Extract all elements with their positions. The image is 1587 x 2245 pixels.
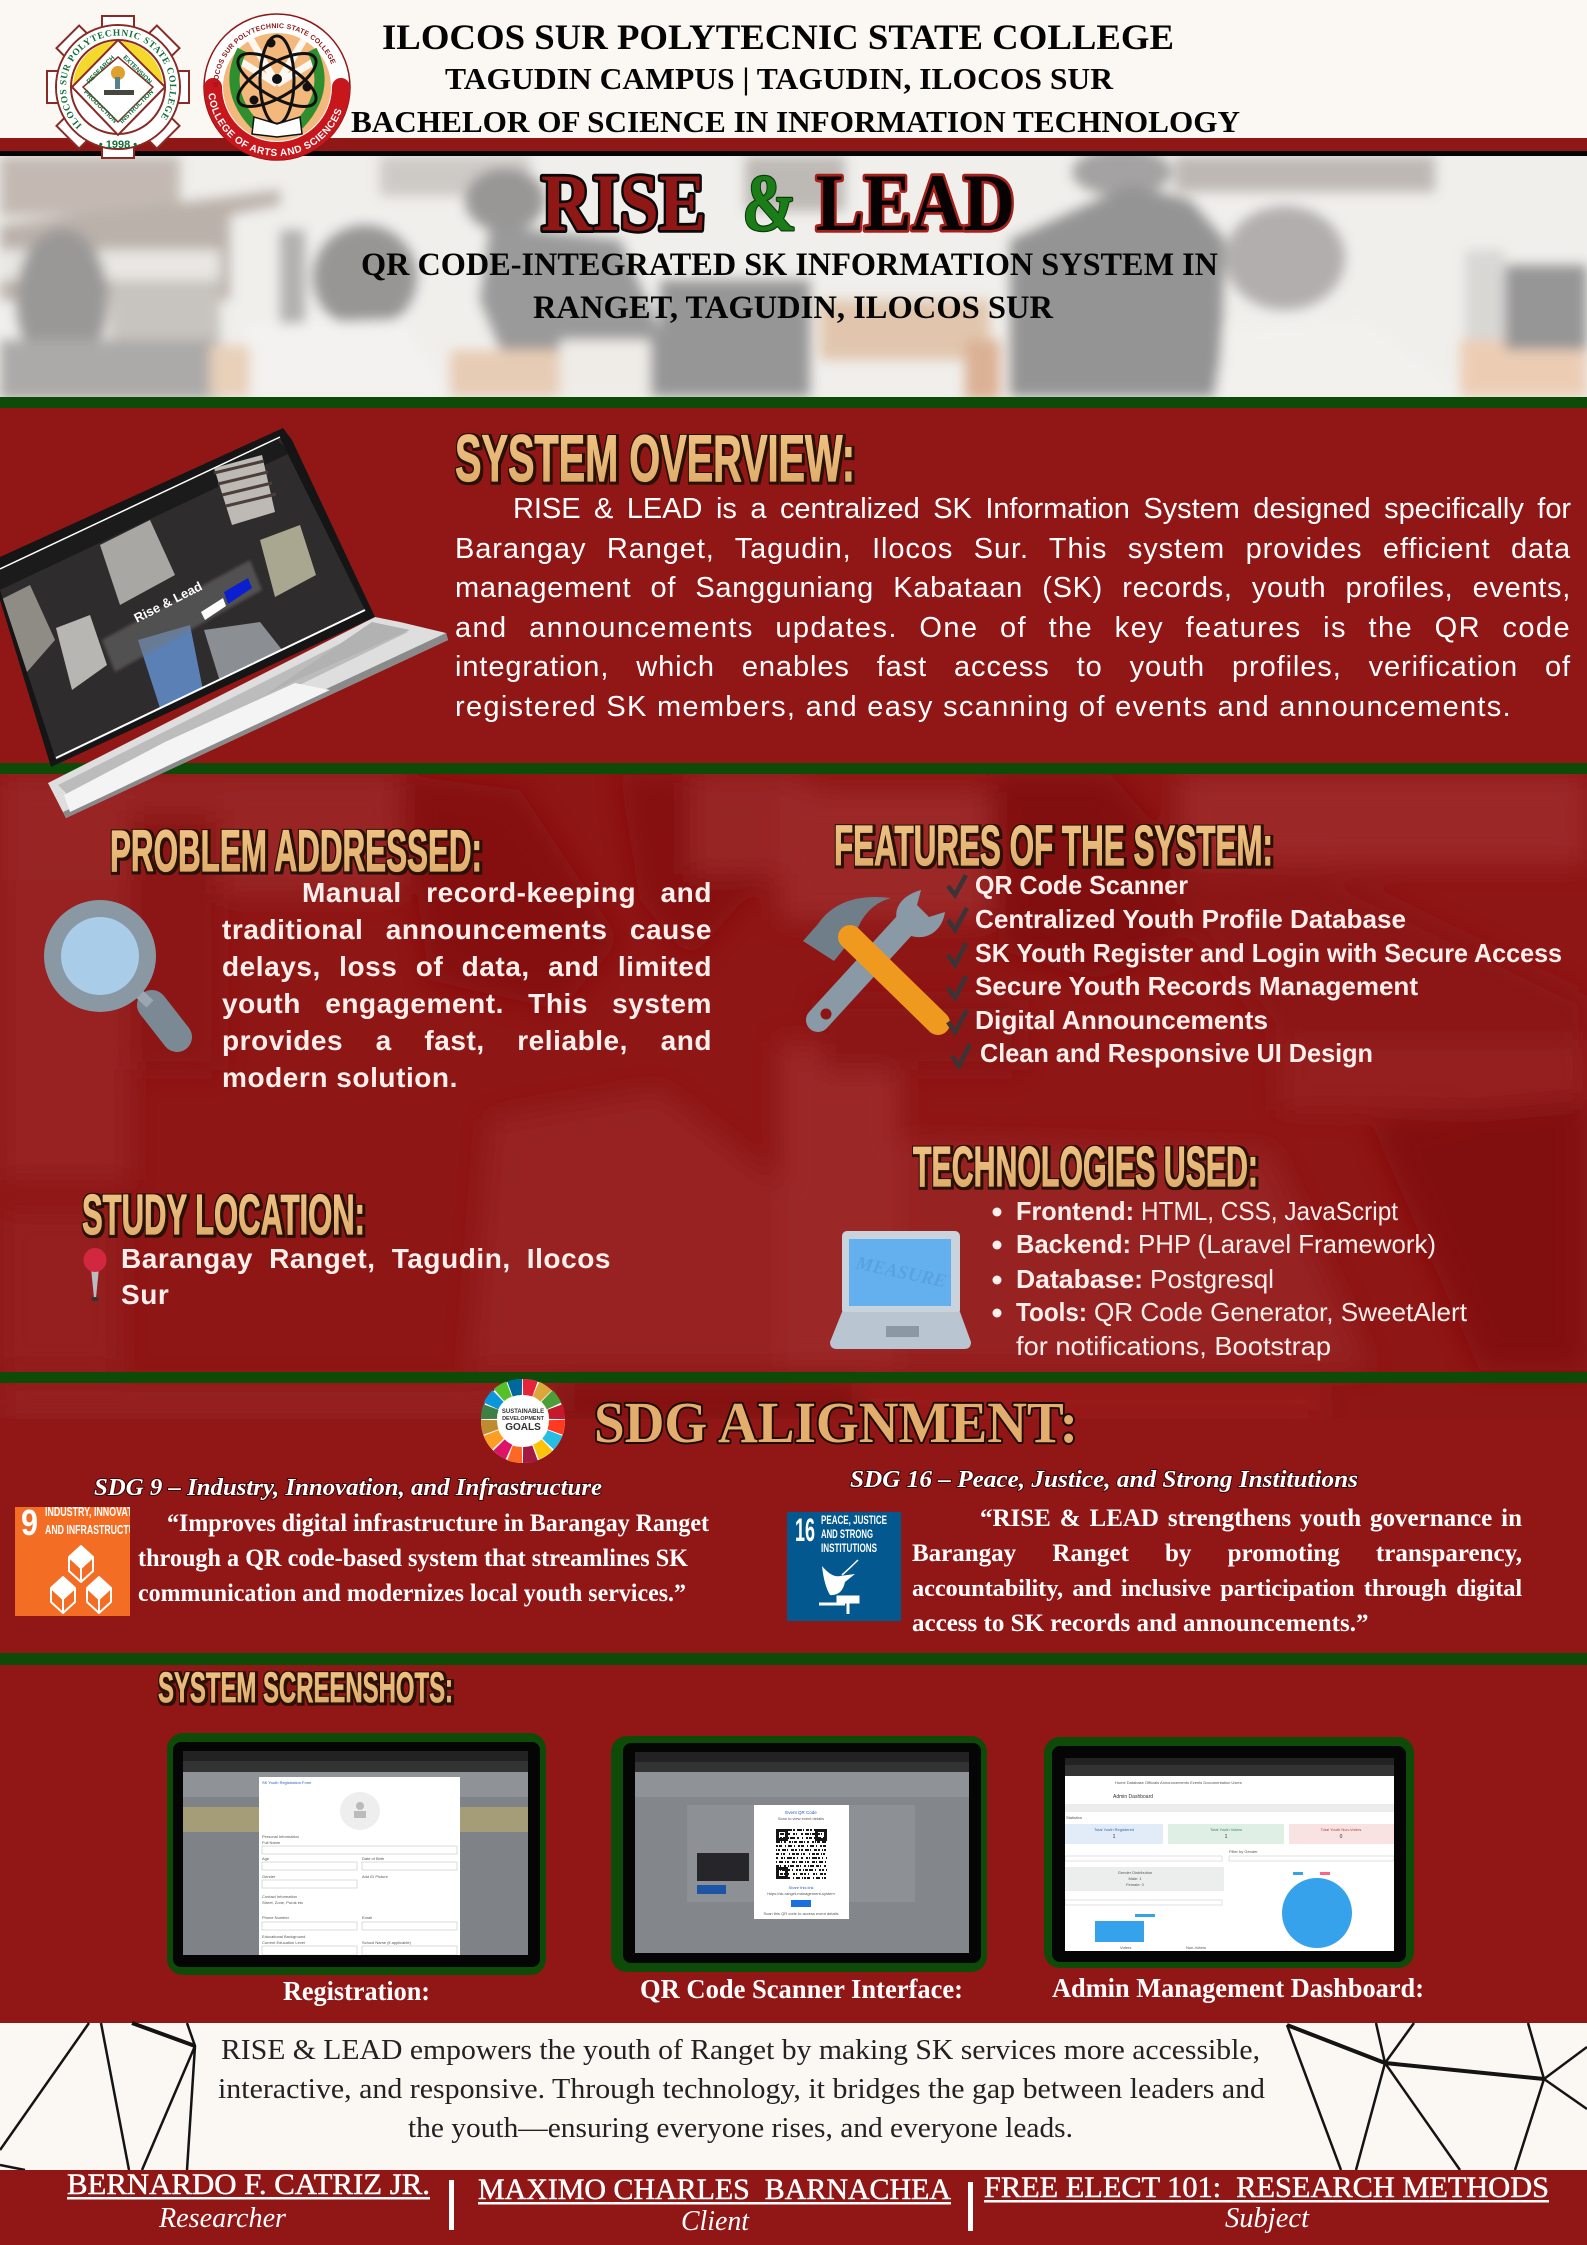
screenshot: admin dashboard: Gender Distribution [1118, 1870, 1152, 1875]
footer: client: MAXIMO CHARLES BARNACHEA [478, 2173, 951, 2206]
hero green band [0, 397, 1587, 408]
SDG 9 title: SDG 9 – Industry, Innovation, and Infrastructure [94, 1475, 602, 1501]
text block: system overview: integration, which enables fast access to youth profiles, verification of [455, 651, 1571, 683]
closing statement: RISE & LEAD empowers the youth of Ranget by making SK services more accessible, [221, 2034, 1260, 2066]
screenshot: registration: Current Education Level [262, 1940, 305, 1945]
laptop site title: Rise & Lead [131, 578, 205, 626]
closing statement [218, 2034, 1266, 2144]
icon: SDG 16 tile [787, 1512, 901, 1621]
screenshot: admin dashboard: Admin Dashboard [1113, 1794, 1153, 1800]
closing statement: the youth—ensuring everyone rises, and everyone leads. [408, 2112, 1073, 2144]
icon: SDG 16 tile: AND STRONG [821, 1527, 873, 1541]
screenshot: admin dashboard: Statistics [1066, 1815, 1082, 1820]
header: institution name: TAGUDIN CAMPUS | TAGUDIN, ILOCOS SUR [445, 61, 1114, 96]
checklist: features: Digital Announcements [975, 1005, 1268, 1035]
list: technologies: Postgresql [1150, 1264, 1274, 1294]
checklist: features: Centralized Youth Profile Database [975, 904, 1406, 934]
screenshot: registration: Email [362, 1915, 372, 1920]
list: technologies [992, 1196, 1468, 1361]
header: institution name: ILOCOS SUR POLYTECNIC STATE COLLEGE [382, 17, 1174, 57]
checklist: features [948, 870, 1562, 1068]
logo: Ilocos Sur Polytechnic State College seal: • 1998 • [99, 139, 137, 151]
icon: laptop [830, 1231, 971, 1349]
icon: hammer and wrench [803, 890, 945, 1023]
screenshot: registration: Street, Zone, Purok etc [262, 1900, 303, 1905]
panel: screenshots section background [0, 1665, 1587, 2023]
screenshot: registration: Educational Background [262, 1934, 305, 1939]
text block: study location: Barangay Ranget, Tagudin, Ilocos [121, 1243, 611, 1274]
screenshot: QR code scanner: Scan this QR code to access event details [764, 1911, 838, 1916]
decorative polygon lines [0, 2023, 1587, 2170]
list: technologies: for notifications, Bootstrap [1016, 1331, 1331, 1361]
panel: middle section photo background [0, 774, 1587, 1420]
screenshot: registration: Gender [262, 1874, 276, 1879]
screenshot: registration: Personal Information [262, 1834, 299, 1839]
text block: SDG 16 description: Barangay Ranget by promoting transparency, [912, 1540, 1522, 1567]
laptop lid [0, 428, 375, 767]
screenshot: registration: School Name (if applicable) [362, 1940, 412, 1945]
footer: client [478, 2173, 951, 2237]
list: technologies: PHP (Laravel Framework) [1138, 1229, 1436, 1259]
text block: SDG 16 description: “RISE & LEAD strengthens youth governance in [980, 1505, 1522, 1532]
logo: College of Arts and Sciences seal: ILOCOS SUR POLYTECHNIC STATE COLLEGE [213, 23, 336, 86]
closing panel background [0, 2023, 1587, 2170]
screenshot: admin dashboard: Total Youth Voters [1210, 1827, 1242, 1832]
screenshot: QR code scanner: Share this link [788, 1885, 814, 1890]
icon: magnifying glass [44, 900, 177, 1037]
text block: problem addressed: modern solution. [222, 1062, 458, 1093]
text block: problem addressed: traditional announcements cause [222, 914, 712, 945]
text block: study location [121, 1241, 611, 1321]
title: RISE & LEAD: RISE [541, 157, 706, 248]
text block: system overview: RISE & LEAD is a centralized SK Information System designed specifically for [513, 493, 1571, 525]
list: technologies: Backend: [1016, 1229, 1131, 1259]
logo: College of Arts and Sciences seal: COLLEGE OF ARTS AND SCIENCES [208, 93, 342, 156]
footer: client: Client [681, 2205, 750, 2237]
title: RISE & LEAD: & [742, 157, 797, 248]
title: RISE & LEAD: LEAD [816, 157, 1015, 248]
icon: SDG wheel: GOALS [505, 1422, 541, 1433]
subtitle: RANGET, TAGUDIN, ILOCOS SUR [533, 290, 1054, 326]
footer: researcher: Researcher [158, 2202, 287, 2234]
logo: Ilocos Sur Polytechnic State College seal: RESEARCH [86, 54, 117, 85]
screenshot captions: QR Code Scanner Interface: [640, 1974, 963, 2004]
icon: map pin [84, 1248, 106, 1301]
list: technologies: HTML, CSS, JavaScript [1141, 1196, 1399, 1226]
screenshot: admin dashboard: Total Youth Non-Voters [1321, 1827, 1361, 1832]
icon: SDG wheel [481, 1379, 565, 1463]
text block: system overview: registered SK members, and easy scanning of events and announcements. [455, 690, 1512, 722]
icon: SDG 16 tile: 16 [795, 1512, 815, 1548]
text block: system overview: and announcements updates. One of the key features is the QR code [455, 612, 1571, 644]
footer divider [968, 2182, 973, 2231]
icon: SDG 16 tile: PEACE, JUSTICE [821, 1513, 887, 1527]
icon: SDG wheel: DEVELOPMENT [502, 1416, 545, 1422]
hero photo background [0, 148, 1587, 400]
SDG 16 title: SDG 16 – Peace, Justice, and Strong Institutions [850, 1467, 1358, 1493]
text block: system overview: management of Sangguniang Kabataan (SK) records, youth profiles, events, [455, 572, 1571, 604]
screenshots heading: SYSTEM SCREENSHOTS: [158, 1664, 453, 1712]
screenshot: admin dashboard: Non-Voters [1186, 1945, 1206, 1950]
footer: subject: FREE ELECT 101: RESEARCH METHODS [984, 2171, 1549, 2204]
technologies heading: TECHNOLOGIES USED: [913, 1135, 1258, 1199]
footer: researcher: BERNARDO F. CATRIZ JR. [67, 2168, 430, 2201]
laptop screen [0, 437, 365, 760]
logo: Ilocos Sur Polytechnic State College seal: INSTRUCTION [119, 89, 155, 125]
logo: Ilocos Sur Polytechnic State College seal [46, 15, 190, 159]
screenshot captions: Admin Management Dashboard: [1052, 1973, 1424, 2003]
study location heading: STUDY LOCATION: [82, 1183, 365, 1247]
text block: SDG 9 description: through a QR code-based system that streamlines SK [138, 1545, 689, 1572]
text block: SDG 9 description: communication and modernizes local youth services.” [138, 1580, 686, 1607]
screenshot: admin dashboard: Filter by Gender [1229, 1849, 1258, 1854]
icon: SDG 9 tile [15, 1502, 135, 1616]
text block: SDG 9 description: “Improves digital infrastructure in Barangay Ranget [167, 1510, 710, 1537]
overview green band [0, 763, 1587, 774]
screenshot: admin dashboard: 1 [1113, 1834, 1116, 1840]
text block: SDG 16 description [912, 1501, 1522, 1646]
text block: system overview: Barangay Ranget, Tagudin, Ilocos Sur. This system provides efficient data [455, 532, 1571, 564]
screenshot captions: Registration: [283, 1976, 430, 2006]
subtitle: QR CODE-INTEGRATED SK INFORMATION SYSTEM IN [361, 247, 1218, 283]
screenshot: registration [167, 1733, 546, 1975]
logo: College of Arts and Sciences seal [203, 13, 351, 161]
screenshot: admin dashboard: Voters [1120, 1945, 1131, 1950]
panel: overview background [0, 408, 1587, 763]
text block: problem addressed: youth engagement. This system [222, 988, 712, 1019]
header maroon rule [0, 138, 1587, 151]
laptop screen highlight [0, 437, 280, 569]
heading: system overview: SYSTEM OVERVIEW: [455, 421, 855, 495]
SDG top green band [0, 1372, 1587, 1383]
problem heading: PROBLEM ADDRESSED: [110, 819, 482, 884]
screenshot: QR code scanner: https://sk-ranget-management-system [767, 1891, 835, 1896]
panel: SDG section background [0, 1419, 1587, 1653]
subtitle [361, 247, 1218, 326]
text block: problem addressed [222, 874, 712, 1104]
icon: SDG 9 tile: 9 [21, 1502, 38, 1543]
logo: Ilocos Sur Polytechnic State College seal: ILOCOS SUR POLYTECHNIC STATE COLLEGE [60, 29, 176, 130]
screenshot: QR code scanner: Scan to view event details [778, 1816, 824, 1821]
icon: SDG 9 tile: INDUSTRY, INNOVATI [45, 1504, 135, 1519]
header: institution name: BACHELOR OF SCIENCE IN INFORMATION TECHNOLOGY [351, 104, 1240, 139]
checklist: features: Clean and Responsive UI Design [980, 1038, 1373, 1068]
footer: researcher [67, 2168, 430, 2234]
text block: system overview [455, 490, 1571, 730]
list: technologies: Frontend: [1016, 1196, 1134, 1226]
text block: problem addressed: Manual record-keeping and [302, 877, 712, 908]
checklist: features: SK Youth Register and Login with Secure Access [975, 938, 1562, 968]
screenshot: admin dashboard [1044, 1737, 1414, 1968]
footer divider [449, 2180, 454, 2230]
footer background [0, 2170, 1587, 2245]
text block: problem addressed: provides a fast, reliable, and [222, 1025, 712, 1056]
screenshot: registration: Full Name [262, 1840, 281, 1845]
screenshot: admin dashboard: Male: 1 [1128, 1876, 1142, 1881]
screenshot: registration: Contact Information [262, 1894, 297, 1899]
text block: SDG 9 description [138, 1510, 710, 1607]
checklist: features: Secure Youth Records Management [975, 971, 1418, 1001]
footer: subject [984, 2171, 1549, 2234]
header: institution name [351, 17, 1240, 139]
logo: Ilocos Sur Polytechnic State College seal: EXTENSION [121, 54, 153, 86]
text block: study location: Sur [121, 1279, 169, 1310]
icon: SDG 9 tile: AND INFRASTRUCTU [45, 1522, 135, 1537]
screenshot: admin dashboard: Home Database Officials Announcements Events Documentation Users [1115, 1780, 1242, 1785]
checklist: features: QR Code Scanner [975, 870, 1188, 900]
icon: SDG wheel: SUSTAINABLE [502, 1409, 544, 1415]
screenshot: registration: Phone Number [262, 1915, 290, 1920]
SDG heading: SDG ALIGNMENT: [594, 1390, 1078, 1455]
screenshot: admin dashboard: 1 [1225, 1834, 1228, 1840]
laptop mockup: Rise and Lead site [0, 428, 448, 818]
icon: SDG 16 tile: INSTITUTIONS [821, 1541, 877, 1555]
screenshot: QR code scanner: Event QR Code [785, 1810, 817, 1815]
footer: subject: Subject [1225, 2202, 1310, 2234]
screenshot: admin dashboard: 0 [1340, 1834, 1343, 1840]
screenshot: registration: Age [262, 1856, 270, 1861]
SDG bottom green band [0, 1653, 1587, 1665]
text block: SDG 16 description: access to SK records and announcements.” [912, 1610, 1368, 1637]
text block: SDG 16 description: accountability, and inclusive participation through digital [912, 1575, 1522, 1602]
screenshot: admin dashboard: Total Youth Registered [1094, 1827, 1134, 1832]
title: RISE & LEAD [541, 157, 1015, 248]
screenshot: QR code scanner [611, 1736, 987, 1972]
screenshot: registration: Date of Birth [362, 1856, 384, 1861]
screenshot captions [283, 1973, 1424, 2006]
screenshot: admin dashboard: Female: 0 [1126, 1882, 1145, 1887]
icon: laptop: MEASURE [853, 1253, 948, 1292]
list: technologies: QR Code Generator, SweetAlert [1094, 1297, 1468, 1327]
laptop base [48, 617, 448, 818]
closing statement: interactive, and responsive. Through technology, it bridges the gap between leaders and [218, 2073, 1266, 2105]
text block: problem addressed: delays, loss of data, and limited [222, 951, 712, 982]
screenshot: registration: SK Youth Registration Form [262, 1780, 312, 1785]
screenshot: registration: Add ID Picture [362, 1874, 389, 1879]
logo: Ilocos Sur Polytechnic State College seal: PRODUCTION [82, 89, 118, 125]
list: technologies: Database: [1016, 1264, 1143, 1294]
list: technologies: Tools: [1016, 1297, 1087, 1327]
header black rule [0, 151, 1587, 156]
